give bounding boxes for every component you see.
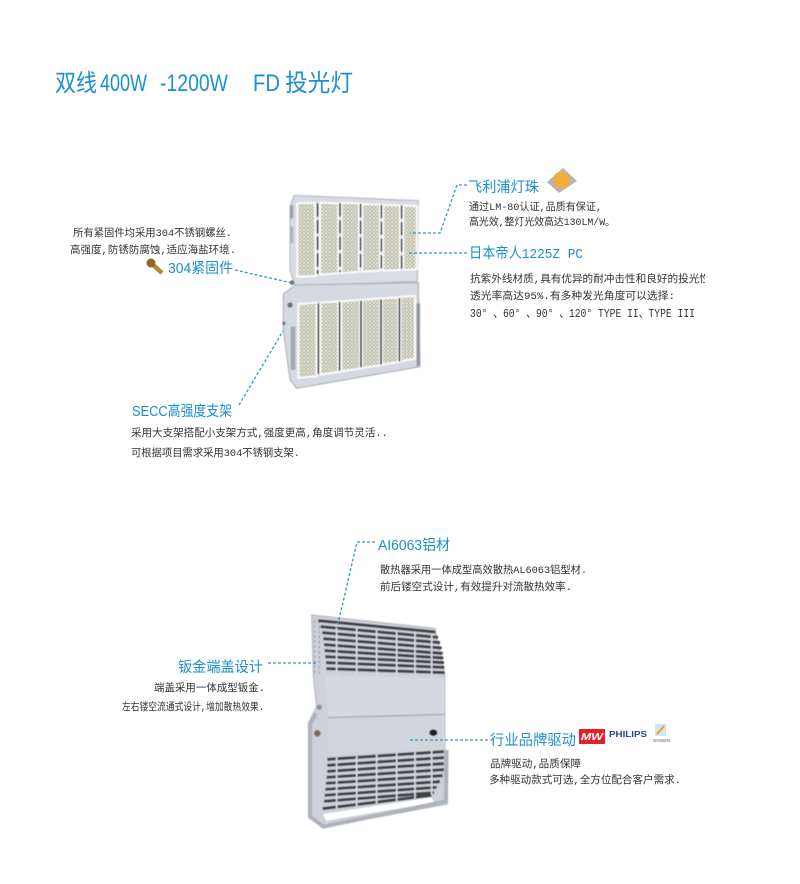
top heat sink fins xyxy=(318,621,445,673)
callout: Teijin PC: 透光率高达95%.有多种发光角度可以选择: xyxy=(470,289,675,303)
callout: SECC bracket: 可根据项目需求采用304不锈钢支架. xyxy=(131,446,300,460)
lower housing xyxy=(283,283,420,388)
callout: brand drivers xyxy=(410,732,681,787)
bottom heat sink fins xyxy=(323,752,444,809)
title: 双线 xyxy=(55,70,97,97)
callout: SECC bracket xyxy=(131,331,388,460)
callout: AI6063 aluminium: 散热器采用一体成型高效散热AL6063铝型材. xyxy=(380,563,587,577)
callout: sheet metal end cap: 钣金端盖设计 xyxy=(178,659,263,676)
icon: third driver brand logo xyxy=(653,724,670,743)
callout: fasteners: 所有紧固件均采用304不锈钢螺丝. xyxy=(73,226,232,240)
title: 投光灯 xyxy=(285,70,353,97)
callout: sheet metal end cap xyxy=(122,659,316,714)
front floodlight product image xyxy=(282,195,420,388)
hinge bolts xyxy=(290,280,294,285)
icon: Mean Well logo xyxy=(579,729,605,744)
mounting bracket xyxy=(323,797,434,821)
callout: fasteners: 高强度,防锈防腐蚀,适应海盐环境. xyxy=(70,243,236,257)
callout: AI6063 aluminium: 前后镂空式设计,有效提升对流散热效率. xyxy=(380,580,572,594)
lower LED modules xyxy=(298,296,415,378)
callout: AI6063 aluminium: AI6063铝材 xyxy=(378,537,450,554)
callout: SECC bracket: SECC高强度支架 xyxy=(132,403,232,420)
callout: fasteners xyxy=(70,226,292,283)
callout: sheet metal end cap: 端盖采用一体成型钣金. xyxy=(154,681,265,695)
icon: screw xyxy=(146,258,162,273)
callout: Philips LED xyxy=(410,179,615,233)
icon: Philips logo: PHILIPS xyxy=(609,730,648,739)
icon: Mean Well logo: MW xyxy=(581,732,605,743)
callout: fasteners: 304紧固件 xyxy=(168,260,233,277)
title: 400W xyxy=(100,70,147,97)
callout: brand drivers: 多种驱动款式可选,全方位配合客户需求. xyxy=(489,773,681,787)
upper LED modules xyxy=(297,203,417,277)
callout: Teijin PC xyxy=(407,245,710,321)
callout: sheet metal end cap: 左右镂空流通式设计,增加散热效果. xyxy=(122,700,264,714)
driver connector xyxy=(429,729,437,736)
icon: LED chip xyxy=(547,168,577,193)
callout: AI6063 aluminium xyxy=(337,537,587,628)
title: -1200W xyxy=(160,70,228,97)
perforated side strip xyxy=(315,620,319,675)
callout: Philips LED: 飞利浦灯珠 xyxy=(468,179,539,196)
upper housing xyxy=(290,195,418,286)
icon: third driver brand logo: SOSEN xyxy=(653,738,670,743)
vertical ribs xyxy=(337,623,432,810)
callout: Teijin PC: 日本帝人1225Z PC xyxy=(469,245,583,263)
callout: Teijin PC: 30° 、60° 、90° 、120° TYPE II、TYPE III xyxy=(470,307,695,321)
housing xyxy=(308,615,447,827)
rear floodlight product image xyxy=(308,615,447,827)
callout: Philips LED: 通过LM-80认证,品质有保证, xyxy=(469,200,602,214)
callout: Teijin PC: 抗紫外线材质,具有优异的耐冲击性和良好的投光性 xyxy=(470,272,710,286)
callout: brand drivers: 品牌驱动,品质保障 xyxy=(490,757,581,771)
centre plates xyxy=(325,675,445,717)
callout: Philips LED: 高光效,整灯光效高达130LM/W。 xyxy=(469,215,615,229)
callout: brand drivers: 行业品牌驱动 xyxy=(490,732,576,749)
callout: SECC bracket: 采用大支架搭配小支架方式,强度更高,角度调节灵活.. xyxy=(131,426,388,440)
title xyxy=(55,70,353,97)
title: FD xyxy=(253,70,280,97)
